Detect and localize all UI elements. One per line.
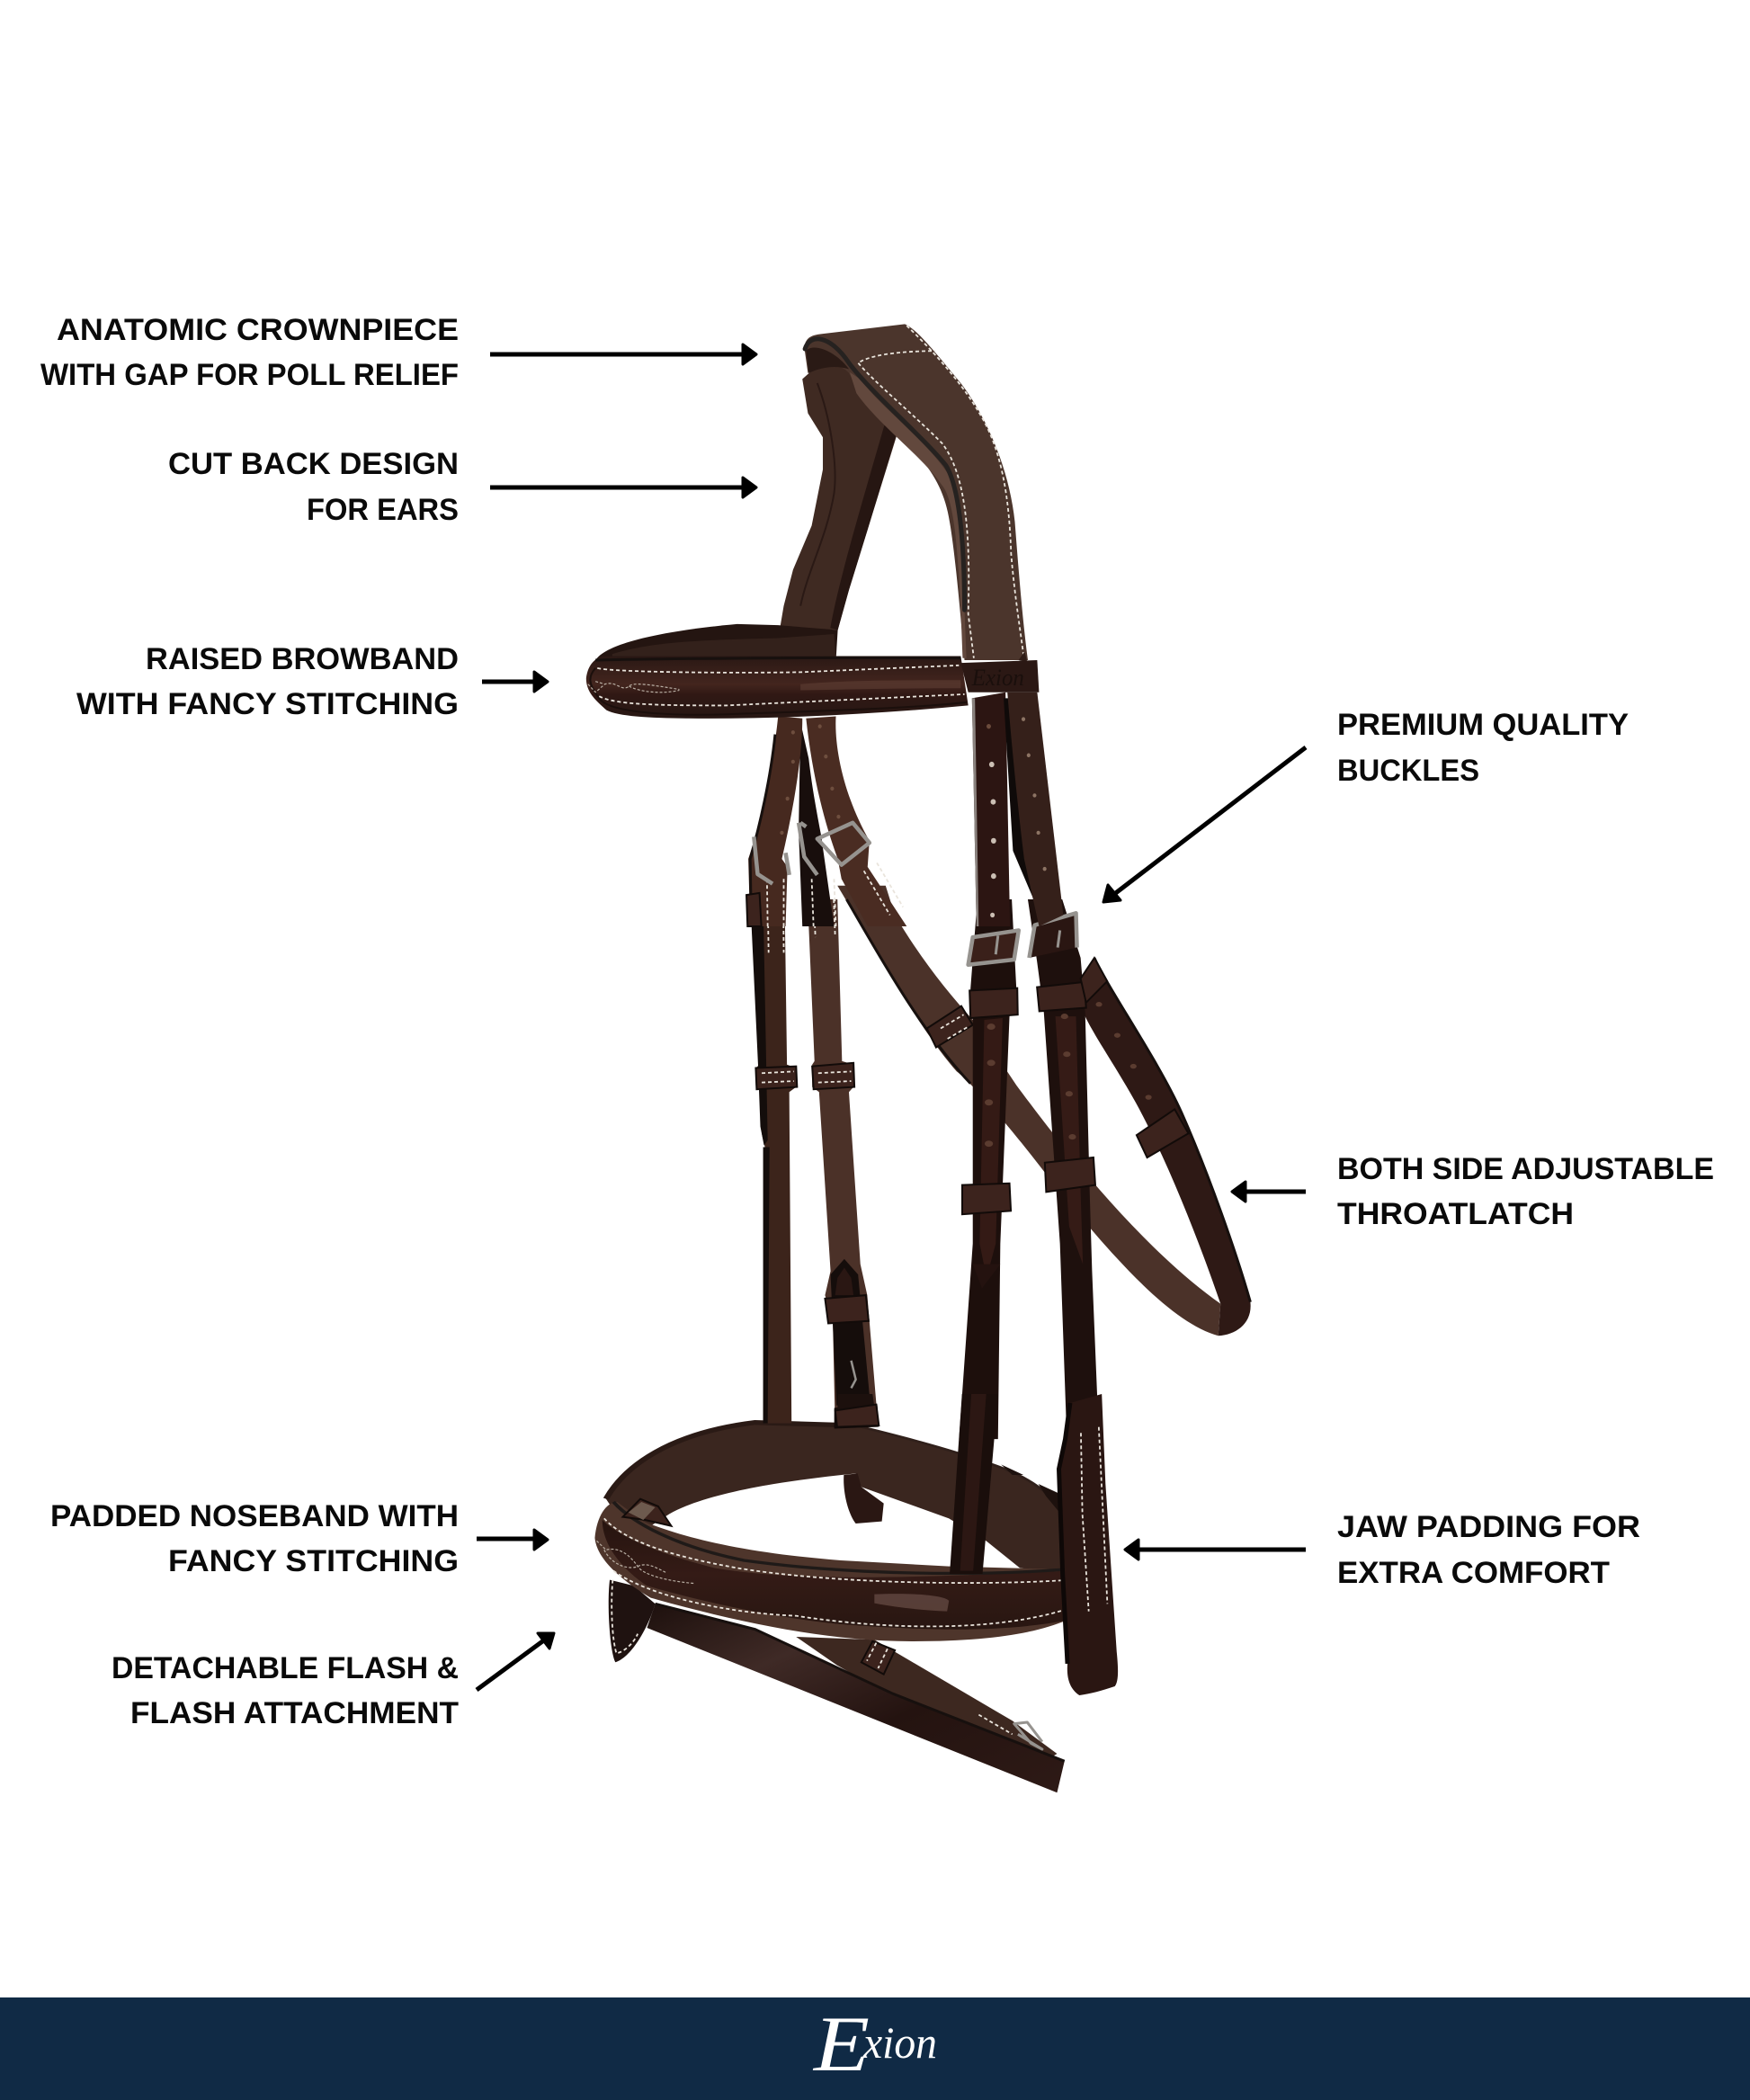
throatlatch strap and loop — [837, 886, 1251, 1336]
label: padded noseband: FANCY STITCHING — [168, 1544, 459, 1578]
arrow: flash — [477, 1633, 554, 1690]
label: detachable flash: FLASH ATTACHMENT — [130, 1696, 459, 1730]
label: throatlatch: THROATLATCH — [1337, 1197, 1574, 1231]
front cheek and jaw padding strap — [950, 1394, 1118, 1695]
footer logo: xion — [862, 2017, 937, 2068]
noseband front with fancy stitching — [594, 1394, 1067, 1641]
arrow: noseband — [477, 1530, 548, 1550]
crownpiece — [780, 324, 1028, 662]
label: cut back design — [168, 447, 459, 527]
footer logo — [812, 2001, 937, 2088]
label: throatlatch — [1337, 1152, 1714, 1231]
label: jaw padding: EXTRA COMFORT — [1337, 1556, 1610, 1590]
label: padded noseband — [50, 1499, 459, 1578]
label: premium buckles — [1337, 708, 1629, 788]
label: premium buckles: BUCKLES — [1337, 754, 1479, 788]
label: jaw padding — [1337, 1510, 1640, 1590]
upper straps and buckles below browband — [746, 693, 1063, 926]
bridle product photo — [586, 324, 1251, 1792]
label: detachable flash — [112, 1651, 459, 1730]
label: raised browband: RAISED BROWBAND — [146, 642, 459, 676]
label: cut back design: FOR EARS — [307, 493, 459, 527]
label: jaw padding: JAW PADDING FOR — [1337, 1510, 1640, 1544]
right cheek straps — [959, 899, 1152, 1439]
label: raised browband: WITH FANCY STITCHING — [76, 687, 459, 721]
arrow: browband — [482, 672, 548, 692]
label: detachable flash: DETACHABLE FLASH & — [112, 1651, 459, 1685]
noseband rear padding and flash strap — [606, 1423, 1065, 1792]
label: cut back design: CUT BACK DESIGN — [168, 447, 459, 481]
label: throatlatch: BOTH SIDE ADJUSTABLE — [1337, 1152, 1714, 1186]
label: anatomic crownpiece: ANATOMIC CROWNPIECE — [57, 313, 459, 347]
label: padded noseband: PADDED NOSEBAND WITH — [50, 1499, 459, 1533]
label: anatomic crownpiece: WITH GAP FOR POLL RELIEF — [40, 358, 459, 392]
label: anatomic crownpiece — [40, 313, 459, 392]
footer bar — [0, 1997, 1750, 2100]
footer logo: E — [812, 2001, 870, 2088]
arrow: crownpiece — [490, 344, 756, 364]
browband: Exion — [971, 664, 1024, 691]
arrow: buckles — [1103, 747, 1306, 902]
arrow: jaw — [1125, 1540, 1306, 1559]
label: premium buckles: PREMIUM QUALITY — [1337, 708, 1629, 742]
label: raised browband — [76, 642, 459, 721]
browband — [586, 624, 1039, 719]
arrow: throatlatch — [1232, 1182, 1306, 1202]
arrow: cut back — [490, 478, 756, 497]
left cheek straps — [750, 899, 878, 1427]
